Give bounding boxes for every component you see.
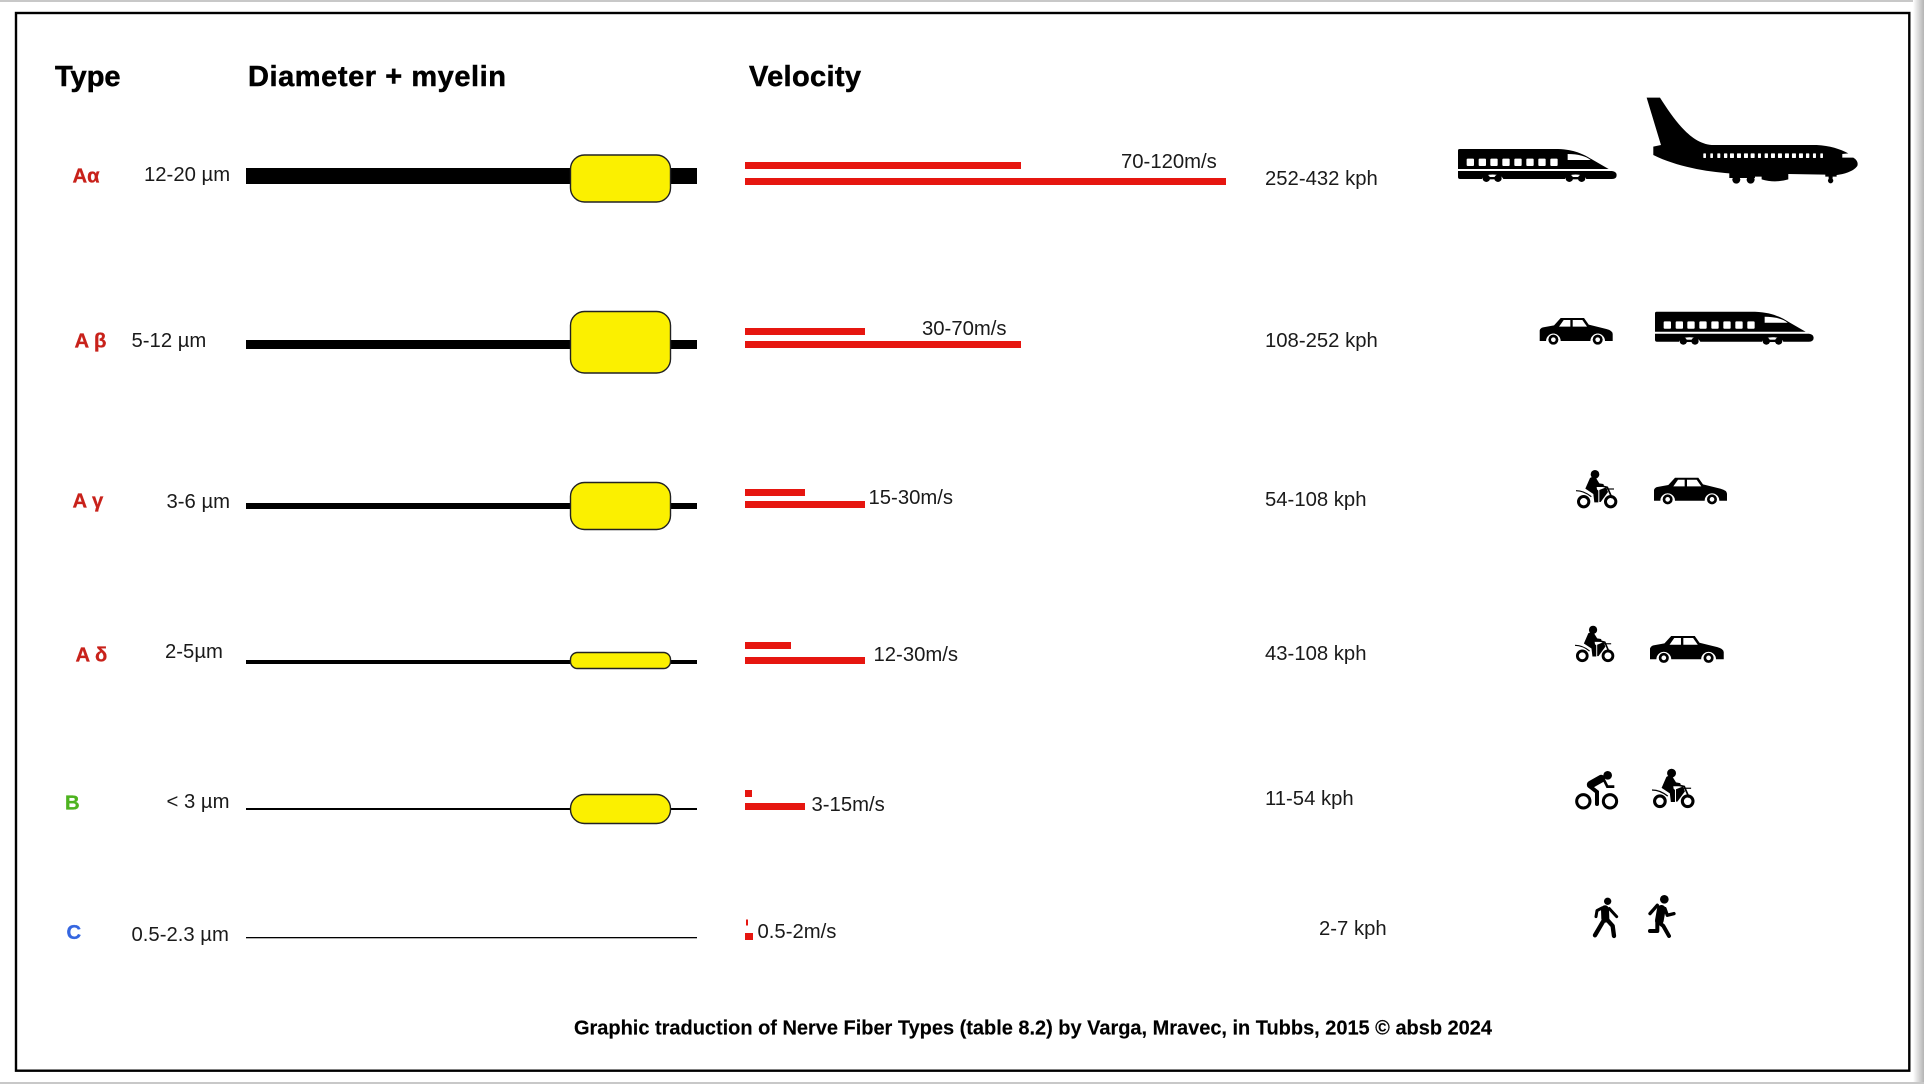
heading: Velocity: Velocity [749,61,861,93]
axon and myelin [246,482,697,530]
kph text: 108-252 kph [1265,330,1378,352]
icon: bicycle [1577,771,1617,808]
icon: car [1654,478,1727,505]
footer credit: Graphic traduction of Nerve Fiber Types (table 8.2) by Varga, Mravec, in Tubbs, 2015 © absb 2024 [574,1018,1493,1040]
axon and myelin [246,794,697,824]
row: C [66,895,1674,946]
diameter text: 0.5-2.3 µm [132,924,229,946]
velocity text: 3-15m/s [812,794,885,816]
icon: train [1655,312,1814,345]
kph text: 43-108 kph [1265,643,1366,665]
diameter text: < 3 µm [166,791,229,813]
velocity bars [745,642,865,664]
heading: Type: Type [55,61,121,93]
icon: car [1650,636,1724,664]
diameter text: 5-12 µm [132,330,206,352]
kph text: 252-432 kph [1265,168,1378,190]
axon and myelin [246,312,697,373]
axon and myelin [246,652,697,668]
velocity bars [745,328,1021,348]
velocity text: 12-30m/s [874,644,958,666]
row: A delta [76,626,1724,668]
type label: Aα [72,166,100,188]
velocity text: 30-70m/s [922,318,1007,340]
velocity text: 0.5-2m/s [758,921,836,943]
row: A beta [74,312,1814,373]
velocity bars [745,162,1226,185]
axon and myelin [246,155,697,202]
axon [246,937,697,938]
type label: C [66,922,82,944]
velocity bars [745,489,865,508]
icon: car [1540,318,1613,346]
diameter text: 12-20 µm [144,164,230,186]
type label: A β [74,330,106,352]
icon: motorcycle [1652,769,1693,807]
row: A gamma [72,470,1727,530]
icon: walking person [1595,898,1617,936]
heading: Diameter + myelin: Diameter + myelin [248,61,506,93]
row: A alpha [72,98,1858,202]
diameter text: 2-5µm [165,641,223,663]
icon: airplane [1647,98,1858,184]
kph text: 11-54 kph [1265,788,1354,810]
icon: train [1458,149,1617,182]
kph text: 2-7 kph [1319,918,1387,940]
icon: motorcycle [1576,470,1616,507]
velocity text: 70-120m/s [1121,151,1217,173]
type label: B [65,792,80,814]
kph text: 54-108 kph [1265,489,1366,511]
type label: A δ [76,644,107,666]
icon: running person [1650,895,1674,936]
velocity bars [745,790,805,810]
icon: motorcycle [1575,626,1613,661]
type label: A γ [72,490,104,512]
row: B [65,769,1693,824]
velocity bars [745,920,753,940]
velocity text: 15-30m/s [868,487,953,509]
diameter text: 3-6 µm [166,491,230,513]
